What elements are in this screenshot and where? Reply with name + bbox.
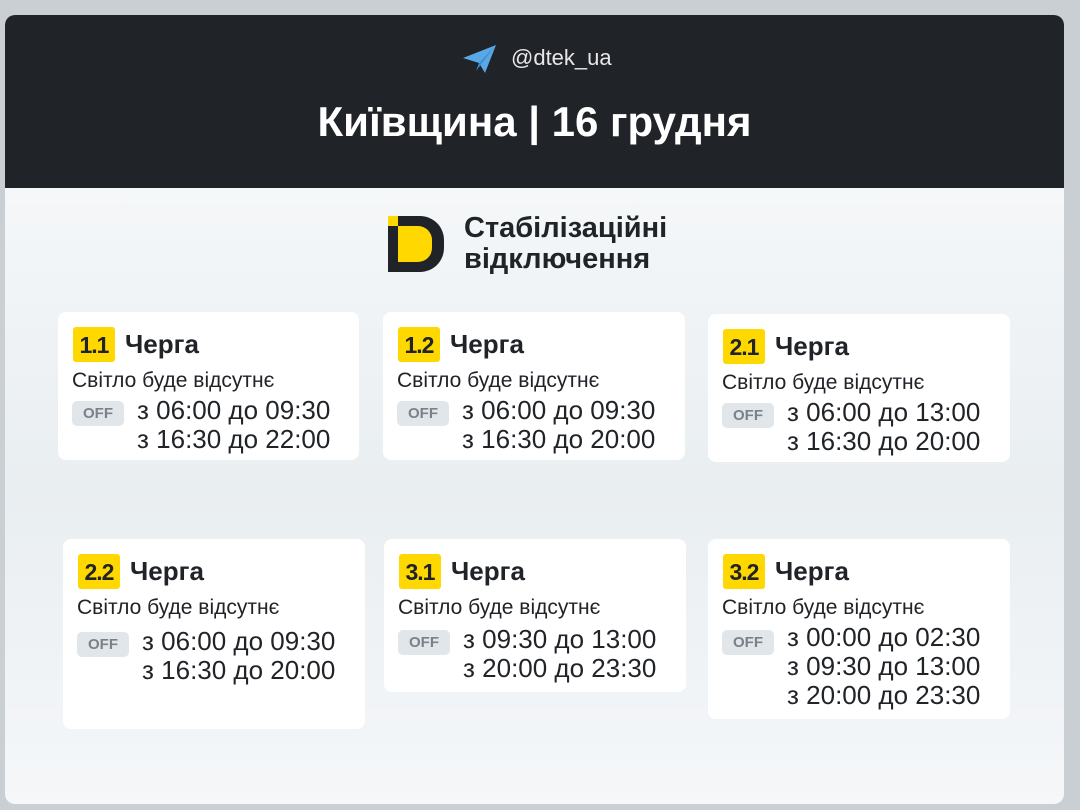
card 3.1: 3.1 — [406, 559, 434, 585]
card 3.2: OFF — [733, 634, 763, 651]
telegram handle: @dtek_ua — [511, 45, 612, 70]
card 3.1: OFF — [409, 634, 439, 651]
card 1.2: з 16:30 до 20:00 — [462, 424, 655, 454]
card 2.1: з 16:30 до 20:00 — [787, 426, 980, 456]
card 2.2: Черга — [130, 556, 204, 586]
card 2.2: Світло буде відсутнє — [77, 596, 279, 619]
logo and subtitle — [388, 212, 667, 275]
card 3.2: з 09:30 до 13:00 — [787, 651, 980, 681]
card 2.1: OFF — [733, 407, 763, 424]
card 1.2: Черга — [450, 329, 524, 359]
logo and subtitle: відключення — [464, 243, 650, 275]
card 1.1: 1.1 — [80, 332, 108, 358]
card 3.2: з 20:00 до 23:30 — [787, 680, 980, 710]
card 3.1: з 20:00 до 23:30 — [463, 653, 656, 683]
card 1.2 — [383, 312, 685, 460]
card 3.2: 3.2 — [730, 559, 758, 585]
card 2.2: OFF — [88, 636, 118, 653]
card 1.2: OFF — [408, 405, 438, 422]
card 2.1 — [708, 314, 1010, 462]
card 3.2: з 00:00 до 02:30 — [787, 622, 980, 652]
card 1.2: з 06:00 до 09:30 — [462, 395, 655, 425]
title: Київщина | 16 грудня — [318, 98, 752, 145]
card 1.2: Світло буде відсутнє — [397, 369, 599, 392]
card 1.1: Світло буде відсутнє — [72, 369, 274, 392]
card 2.2 — [63, 539, 365, 729]
card 3.1: з 09:30 до 13:00 — [463, 624, 656, 654]
card 2.1: Черга — [775, 331, 849, 361]
card 2.2: з 06:00 до 09:30 — [142, 626, 335, 656]
logo and subtitle: Стабілізаційні — [464, 212, 667, 244]
card 3.2: Черга — [775, 556, 849, 586]
card 3.2 — [708, 539, 1010, 719]
card 1.2: 1.2 — [404, 332, 433, 358]
card 3.1: Черга — [451, 556, 525, 586]
card 2.1: з 06:00 до 13:00 — [787, 397, 980, 427]
card 1.1: з 06:00 до 09:30 — [137, 395, 330, 425]
card 2.1: 2.1 — [730, 334, 758, 360]
card 2.1: Світло буде відсутнє — [722, 371, 924, 394]
card 3.1: Світло буде відсутнє — [398, 596, 600, 619]
card 2.2: з 16:30 до 20:00 — [142, 655, 335, 685]
card 1.1 — [58, 312, 359, 460]
card 1.1: OFF — [83, 405, 113, 422]
card 3.2: Світло буде відсутнє — [722, 596, 924, 619]
card 2.2: 2.2 — [84, 559, 113, 585]
card 1.1: з 16:30 до 22:00 — [137, 424, 330, 454]
header — [5, 15, 1064, 188]
card 3.1 — [384, 539, 686, 692]
card 1.1: Черга — [125, 329, 199, 359]
telegram handle — [463, 45, 612, 73]
